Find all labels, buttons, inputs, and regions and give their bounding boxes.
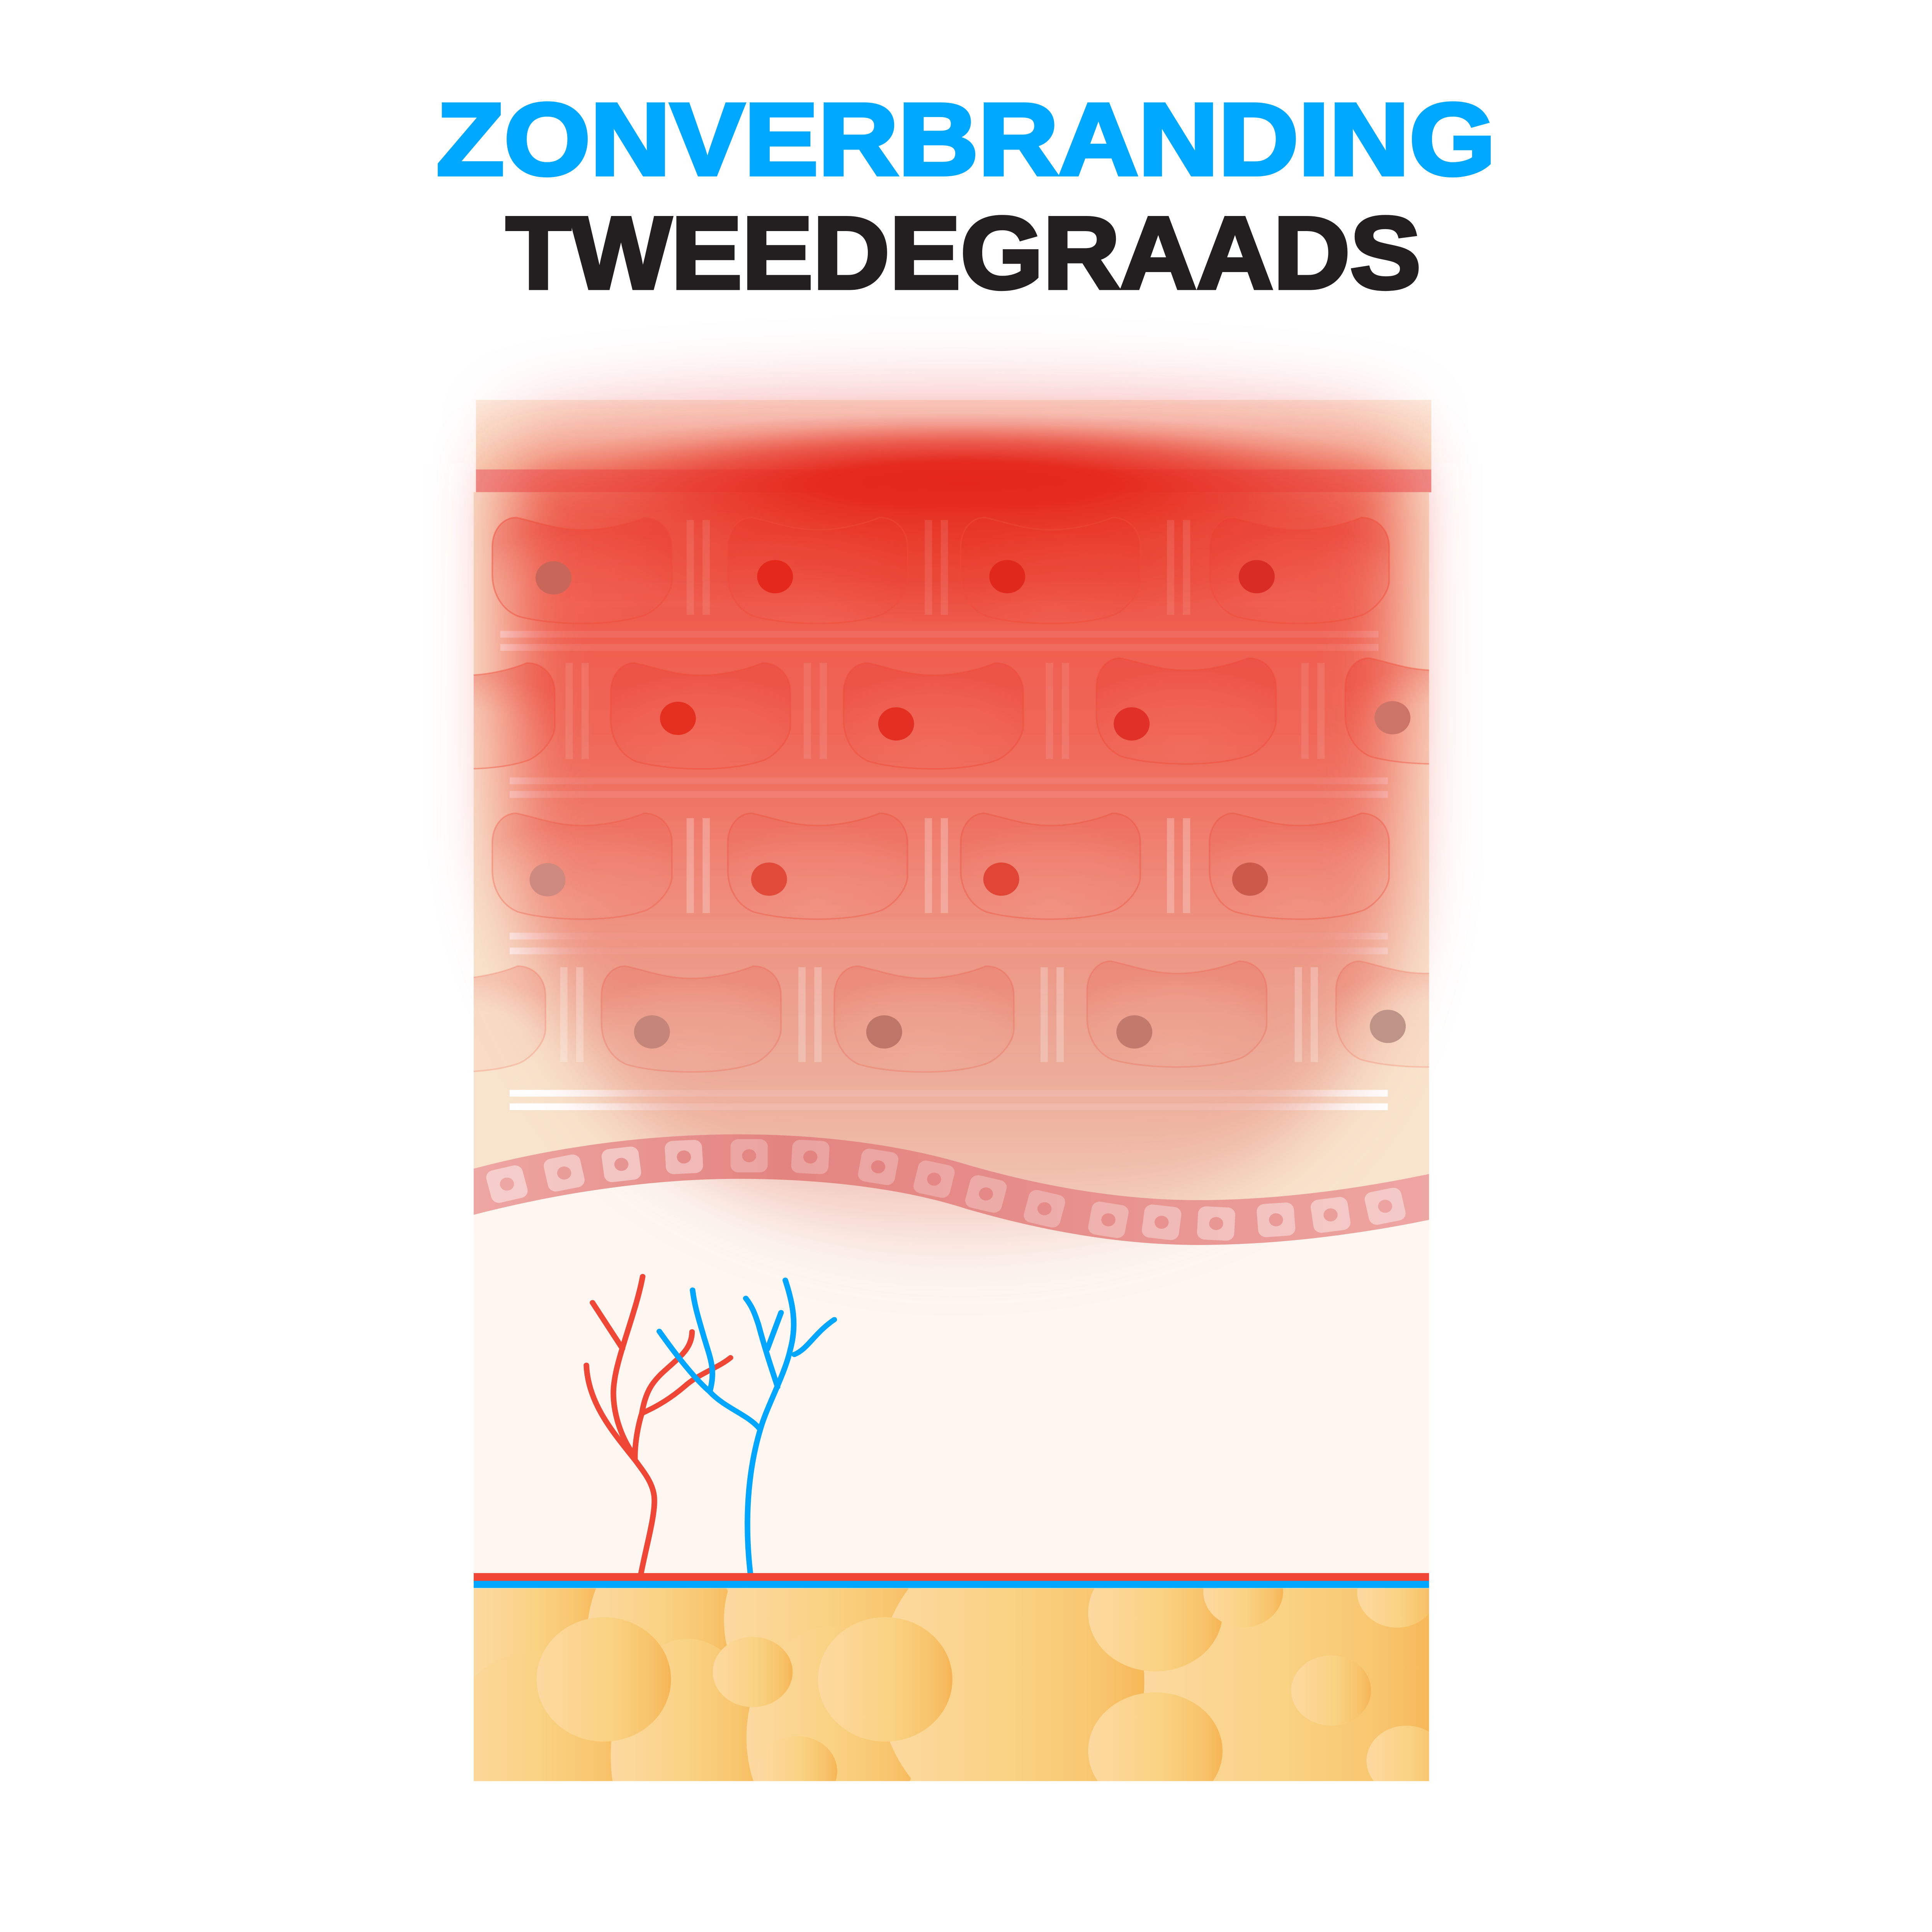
basal membrane band <box>474 1134 1429 1245</box>
cell row 3 <box>492 813 1389 919</box>
cell 2-5 <box>1345 658 1525 764</box>
white horizontal cell junction lines <box>500 631 1388 1110</box>
panel: skin cross-section layers <box>474 400 1431 1573</box>
cell 1-1 <box>492 517 672 624</box>
cell 3-3 <box>961 813 1140 919</box>
fat base lobules <box>447 1515 1144 1873</box>
heat body <box>508 463 1400 1247</box>
cell 3-1 <box>492 813 672 919</box>
vertical cell junction lines <box>565 520 1325 759</box>
vein: blue vessel tree <box>659 1280 834 1581</box>
faint junction line highlight over heat <box>500 631 1388 798</box>
dermis layer <box>474 1179 1429 1573</box>
cell 3-4 <box>1209 813 1389 919</box>
cell 2-3 <box>844 663 1023 769</box>
cell 2-1 <box>375 663 555 769</box>
lower vertical cell junction lines <box>560 818 1318 1062</box>
pink band under top layer <box>476 469 1431 492</box>
fat flat base <box>474 1588 1429 1782</box>
cell row 1 <box>492 517 1389 624</box>
subtitle: tweedegraads: TWEEDEGRAADS <box>506 196 1421 310</box>
cell 1-3 <box>961 517 1140 624</box>
cell 2-4 <box>1096 658 1276 764</box>
cell 3-2 <box>728 813 907 919</box>
red blood vessel bar <box>474 1573 1429 1581</box>
cell 4-2 <box>601 966 781 1072</box>
cell 4-4 <box>1087 961 1267 1067</box>
fat base right <box>1139 1588 1429 1782</box>
cell 4-5 <box>1336 961 1515 1067</box>
cell 4-1 <box>366 966 546 1072</box>
epidermis cream base <box>474 492 1429 1231</box>
stratum corneum top layer <box>476 400 1431 469</box>
cell 2-2 <box>611 663 790 769</box>
infographic canvas <box>437 101 1491 1781</box>
fat base left <box>474 1588 599 1782</box>
membrane cells <box>485 1139 1407 1241</box>
title: zonverbranding: ZONVERBRANDING <box>436 83 1496 197</box>
fat top lobules <box>537 1554 1446 1810</box>
cell 1-4 <box>1209 517 1389 624</box>
cell 4-3 <box>834 966 1014 1072</box>
cell 1-2 <box>728 517 907 624</box>
cell row 4 <box>366 961 1515 1072</box>
hottest zone at skin surface <box>506 413 1424 556</box>
membrane wave <box>474 1134 1429 1245</box>
sunburn heat glow <box>496 383 1424 1247</box>
epidermis cells <box>474 517 1429 1073</box>
artery: red vessel tree <box>587 1277 730 1576</box>
blue blood vessel bar <box>474 1581 1429 1588</box>
intense zone in first cell row <box>585 456 1357 628</box>
cell row 2 <box>375 658 1525 769</box>
fat layer <box>447 1515 1446 1873</box>
glow above skin <box>496 383 1414 467</box>
